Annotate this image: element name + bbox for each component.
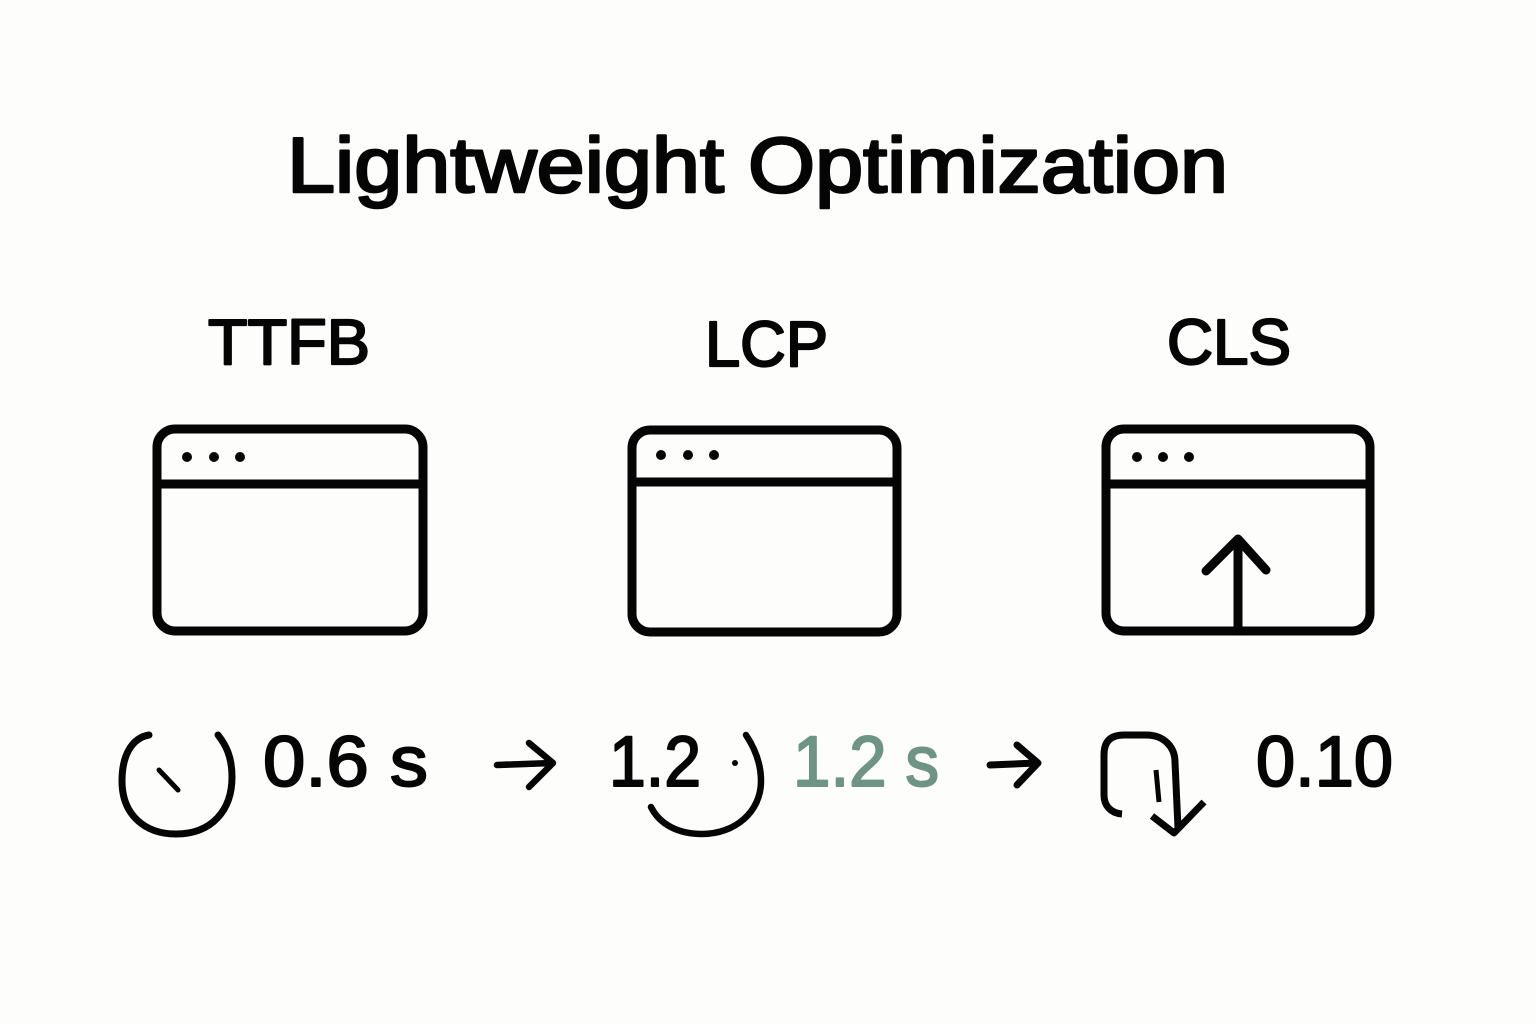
icon: CLS browser window with up arrow bbox=[1106, 429, 1370, 631]
arrow: first bbox=[497, 743, 553, 787]
arrow: second bbox=[990, 745, 1038, 785]
heading: LCP: LCP bbox=[705, 308, 828, 380]
value: 0.6 s: 0.6 s bbox=[263, 723, 428, 802]
value: 1.2: 1.2 bbox=[609, 723, 701, 802]
value: 0.10: 0.10 bbox=[1256, 723, 1393, 802]
value: 1.2 s green: 1.2 s bbox=[793, 723, 939, 802]
icon: shift down box bbox=[1104, 735, 1204, 833]
icon: stopwatch middle bbox=[651, 735, 761, 834]
icon: stopwatch left bbox=[122, 735, 232, 834]
heading: TTFB: TTFB bbox=[208, 306, 370, 378]
title: Lightweight Optimization bbox=[287, 121, 1228, 209]
icon: TTFB browser window bbox=[157, 429, 423, 631]
icon: LCP browser window bbox=[632, 430, 897, 632]
heading: CLS: CLS bbox=[1167, 306, 1291, 378]
